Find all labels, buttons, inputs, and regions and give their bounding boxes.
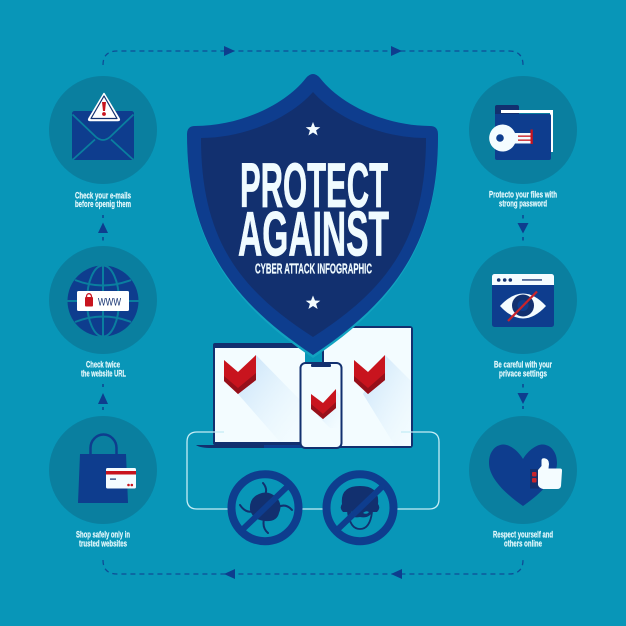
icon: browser window with crossed eye — [492, 274, 554, 327]
tablet — [322, 326, 413, 448]
icon: shopping bag and card — [78, 434, 136, 503]
caption: email tip: Check your e-mails — [75, 190, 131, 200]
caption: shopping tip: Shop safely only in — [76, 530, 130, 540]
panel: website URL tip — [49, 246, 157, 379]
arrow: privacy down to respect — [518, 384, 528, 409]
caption: password tip: Protecto your files with — [489, 190, 557, 200]
connector line around devices and threats — [187, 432, 439, 509]
panel: privacy tip — [469, 246, 577, 379]
caption: password tip: strong password — [499, 199, 547, 209]
caption: website URL tip: Check twice — [86, 360, 120, 370]
shield: PROTECT — [240, 151, 388, 221]
caption: respect tip: Respect yourself and — [493, 530, 553, 540]
title: against: AGAINST — [238, 200, 389, 270]
panel: respect tip — [469, 416, 577, 549]
caption: respect tip: others online — [504, 539, 542, 549]
shield — [187, 74, 438, 358]
caption: email tip: before openig them — [75, 199, 131, 209]
caption: privacy tip: Be careful with your — [494, 360, 552, 370]
arrow: globe up from bag — [98, 384, 108, 410]
laptop — [196, 343, 305, 448]
caption: website URL tip: the website URL — [81, 369, 126, 379]
smartphone — [300, 363, 342, 448]
devices group — [196, 326, 413, 448]
no-hacker symbol — [326, 474, 394, 541]
icon: bottom star — [306, 296, 320, 309]
no-virus symbol — [232, 474, 298, 541]
caption: shopping tip: trusted websites — [79, 539, 127, 549]
dashed cycle path: bottom — [103, 560, 523, 579]
arrow: files down to privacy — [518, 215, 528, 240]
arrow: emails up from globe — [98, 215, 108, 240]
subtitle: CYBER ATTACK INFOGRAPHIC — [255, 262, 372, 278]
icon: folder with key — [489, 105, 553, 160]
panel: email tip — [49, 76, 157, 209]
panel: shopping tip — [49, 416, 157, 549]
dashed cycle path: top — [103, 46, 523, 65]
panel: password tip — [469, 76, 577, 209]
icon: globe with URL bar: WWW — [98, 296, 121, 308]
icon: envelope — [72, 94, 134, 160]
caption: privacy tip: privace settings — [499, 369, 547, 379]
icon: heart with thumbs up — [489, 444, 562, 506]
icon: top star — [306, 122, 320, 136]
